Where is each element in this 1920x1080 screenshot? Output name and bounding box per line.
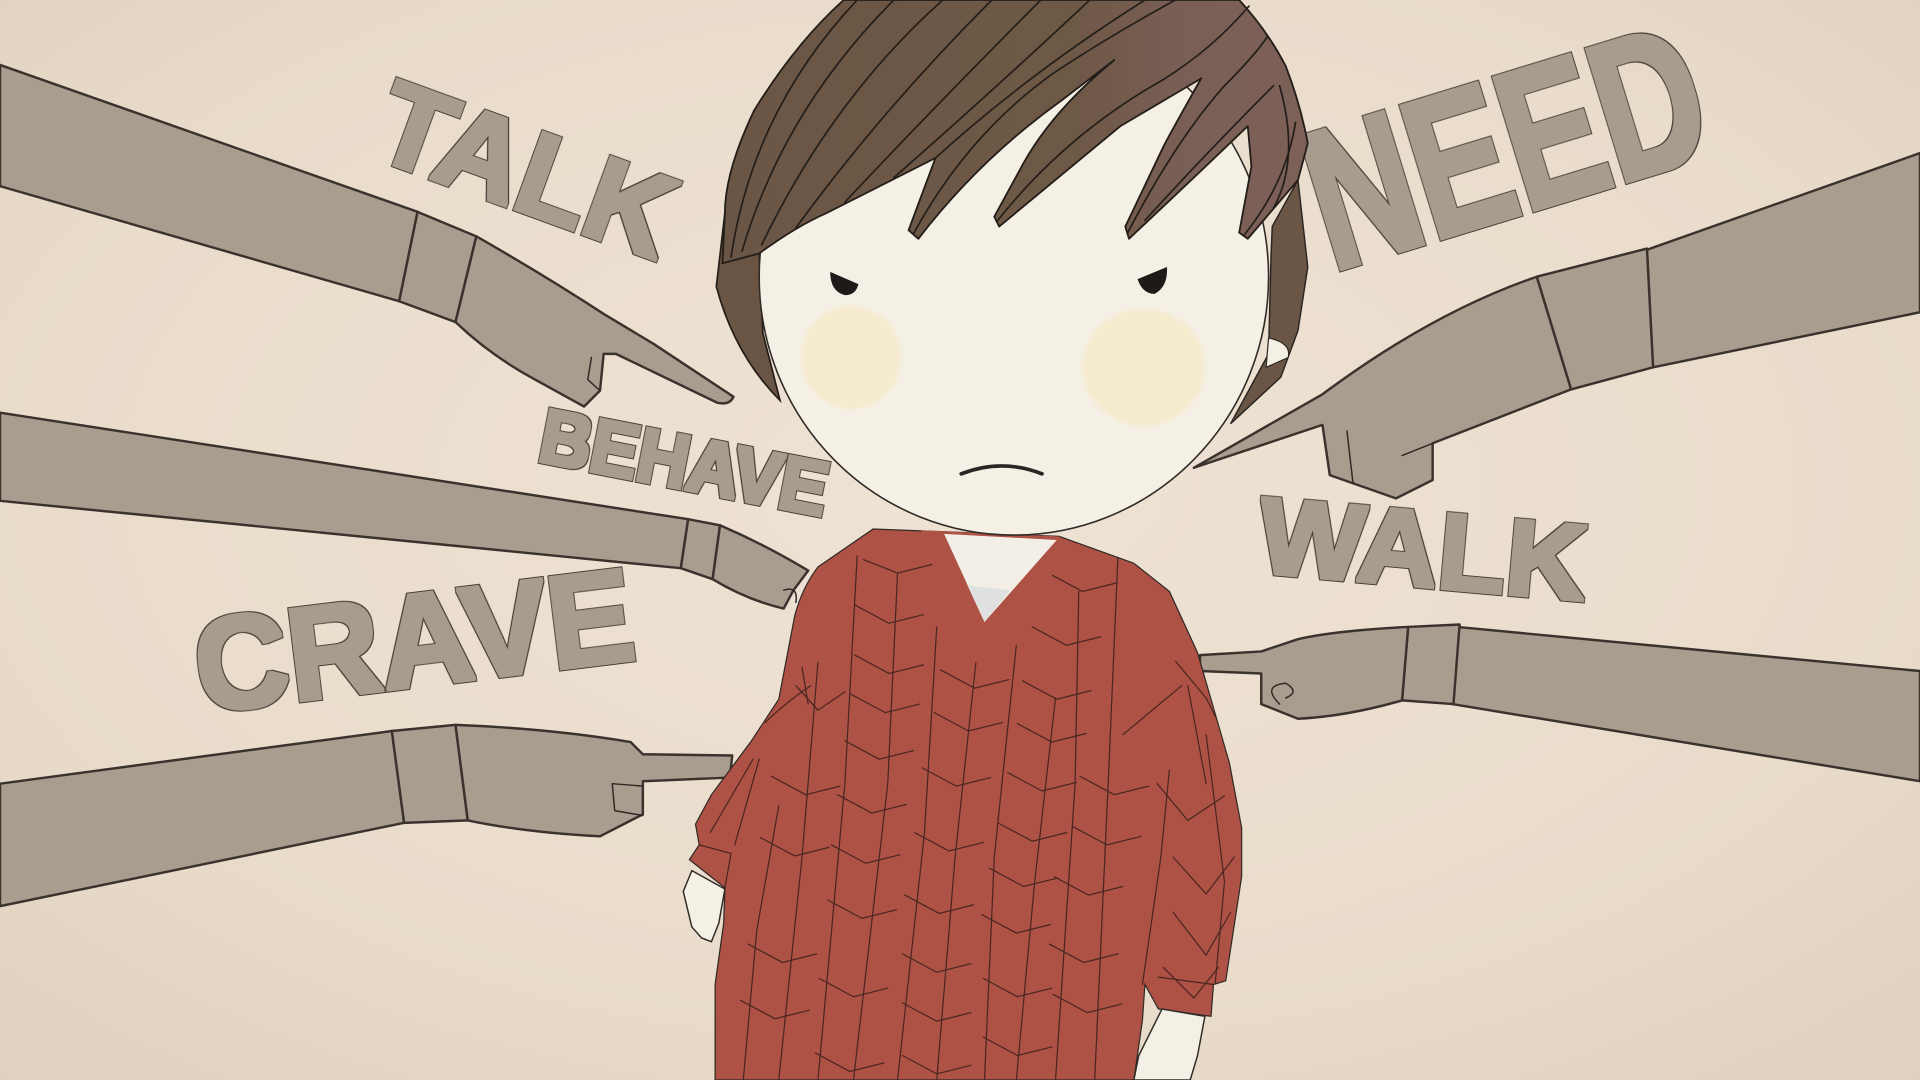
left eye <box>830 272 858 295</box>
hair mass <box>722 0 1308 263</box>
right eye <box>1138 267 1167 294</box>
knit chevrons <box>741 560 1234 1074</box>
arm: upper right pointing <box>1194 153 1920 498</box>
back hair left side <box>716 208 780 400</box>
child's sweater <box>689 529 1242 1080</box>
arm: lower right pointing <box>1200 624 1920 781</box>
word: BEHAVE: BEHAVE <box>533 394 835 533</box>
arm: middle left pointing <box>0 413 808 609</box>
left sleeve gathers <box>699 667 811 888</box>
neck shadow <box>967 585 1010 622</box>
sweater body and sleeves <box>689 529 1242 1080</box>
word: CRAVE: CRAVE <box>186 541 642 741</box>
word: TALK: TALK <box>360 56 692 284</box>
knit verticals <box>735 556 1224 1080</box>
hair <box>722 0 1308 263</box>
right cheek <box>1082 309 1205 426</box>
mouth <box>961 466 1042 474</box>
child's neck <box>944 534 1057 622</box>
right hand of child <box>1134 1009 1205 1080</box>
hair strands <box>731 0 1296 257</box>
right sleeve gathers <box>1123 686 1213 984</box>
back hair right side <box>1231 180 1308 424</box>
head <box>759 18 1269 535</box>
word: WALK: WALK <box>1254 474 1592 623</box>
left hand of child <box>683 871 725 942</box>
left cheek <box>801 306 901 409</box>
arm: lower left pointing <box>0 725 732 906</box>
sweater collar <box>921 530 1075 662</box>
ear <box>1266 338 1289 367</box>
arm: top left pointing <box>0 65 733 407</box>
